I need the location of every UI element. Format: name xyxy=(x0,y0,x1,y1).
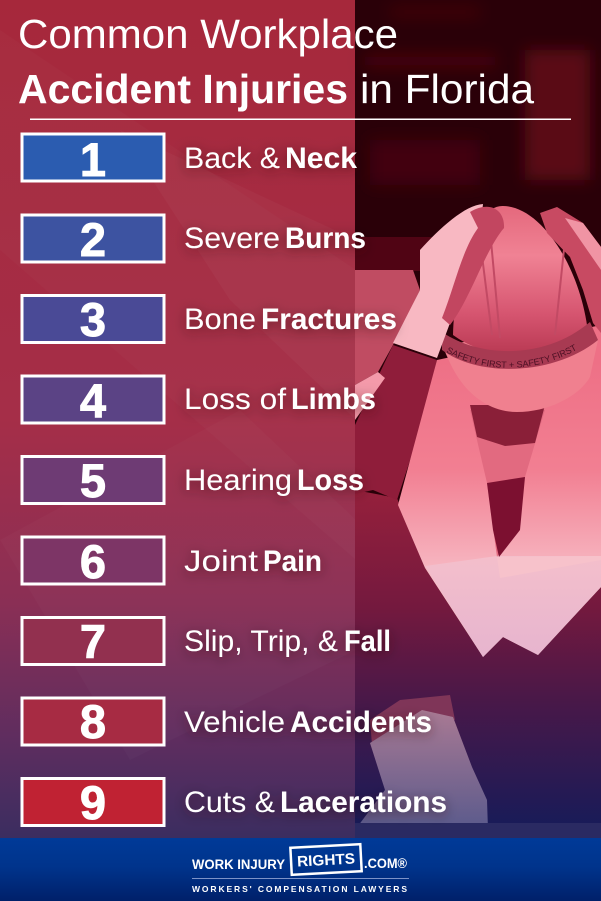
item 8: vehicle accidents: Vehicle xyxy=(184,706,285,739)
shirt xyxy=(355,325,601,657)
item 6: joint pain: 6 xyxy=(80,535,106,588)
forearm xyxy=(355,345,437,500)
item 6: joint pain: Joint xyxy=(184,545,259,578)
title: Common Workplace xyxy=(18,11,398,57)
hat ridges xyxy=(480,230,565,338)
right collar edge xyxy=(497,556,601,578)
item 3: bone fractures xyxy=(22,293,397,346)
item 6: joint pain: Pain xyxy=(263,545,322,578)
glove: left hand xyxy=(393,204,483,358)
glove highlight: right hand xyxy=(565,218,601,270)
item 1: back and neck: 1 xyxy=(80,133,106,186)
item 2: severe burns: Severe xyxy=(184,222,280,255)
item 9: cuts and lacerations xyxy=(22,776,447,829)
item 5: hearing loss: Loss xyxy=(297,464,364,497)
item 1: back and neck xyxy=(22,133,357,186)
lower shirt xyxy=(425,556,601,657)
hard hat xyxy=(442,206,598,412)
face shadow xyxy=(470,405,545,446)
item 8: vehicle accidents: Accidents xyxy=(290,706,432,739)
item 5: hearing loss xyxy=(22,454,364,507)
item 6: joint pain xyxy=(22,535,322,588)
item 4: loss of limbs xyxy=(22,374,376,427)
jeans xyxy=(355,490,601,838)
t-shirt print xyxy=(487,477,525,557)
item 9: cuts and lacerations: 9 xyxy=(80,776,106,829)
logo badge: rights xyxy=(290,844,362,875)
hat band xyxy=(442,322,598,369)
jeans cuff xyxy=(370,695,455,745)
logo: Work Injury Rights xyxy=(192,844,409,894)
item 5: hearing loss: 5 xyxy=(80,454,106,507)
item 8: vehicle accidents xyxy=(22,695,432,748)
title xyxy=(18,11,534,112)
item 7: slip, trip and fall xyxy=(22,615,391,668)
photo background wall xyxy=(355,0,601,838)
panel: footer bar xyxy=(0,838,601,901)
item 2: severe burns xyxy=(22,213,366,266)
shirt sleeve sliver xyxy=(355,372,385,420)
item 7: slip, trip and fall: Fall xyxy=(344,625,391,658)
title: in Florida xyxy=(360,66,534,112)
item 3: bone fractures: Fractures xyxy=(261,303,397,336)
panel: left gradient background xyxy=(0,0,356,838)
logo: Work Injury Rights: .COM® xyxy=(364,856,407,871)
item 3: bone fractures: Bone xyxy=(184,303,256,336)
logo badge: rights: RIGHTS xyxy=(297,850,355,871)
glove: right hand xyxy=(540,207,601,333)
item 9: cuts and lacerations: Cuts & xyxy=(184,786,275,819)
photo: worker holding hard hat xyxy=(355,0,601,838)
title: Accident Injuries xyxy=(18,66,348,112)
neck xyxy=(470,410,545,557)
item 2: severe burns: Burns xyxy=(285,222,366,255)
item 1: back and neck: Neck xyxy=(285,142,357,175)
item 3: bone fractures: 3 xyxy=(80,293,106,346)
lower floor band xyxy=(355,823,601,838)
item 7: slip, trip and fall: Slip, Trip, & xyxy=(184,625,338,658)
hat dome xyxy=(453,206,588,356)
item 5: hearing loss: Hearing xyxy=(184,464,292,497)
band lettering: SAFETY FIRST + SAFETY FIRST xyxy=(446,344,575,368)
item 8: vehicle accidents: 8 xyxy=(80,695,106,748)
item 4: loss of limbs: Limbs xyxy=(291,383,376,416)
hat brim xyxy=(442,325,598,412)
item 4: loss of limbs: 4 xyxy=(80,374,106,427)
item 4: loss of limbs: Loss of xyxy=(184,383,287,416)
item 9: cuts and lacerations: Lacerations xyxy=(280,786,447,819)
item 1: back and neck: Back & xyxy=(184,142,280,175)
logo: Work Injury Rights: WORK INJURY xyxy=(192,857,285,872)
item 2: severe burns: 2 xyxy=(80,213,106,266)
glove fingers: left hand xyxy=(442,207,504,325)
item 7: slip, trip and fall: 7 xyxy=(80,615,106,668)
shirt underlayer xyxy=(398,325,601,657)
logo: Work Injury Rights: WORKERS' COMPENSATION LAWYERS xyxy=(192,884,407,894)
footwear xyxy=(355,710,488,830)
